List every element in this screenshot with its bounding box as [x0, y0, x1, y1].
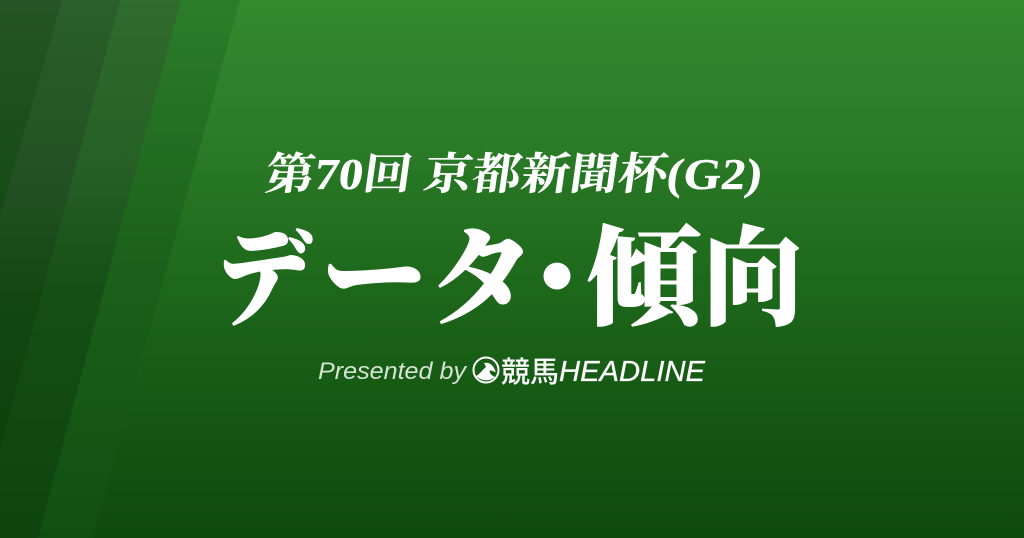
diagonal band 2	[0, 0, 181, 538]
main heading: ー	[321, 192, 427, 347]
subtitle: race name: 第70回 京都新聞杯(G2)	[263, 150, 765, 199]
logo wordmark latin: HEADLINE	[559, 356, 706, 388]
diagonal band 4	[0, 0, 62, 216]
presented by text: Presented by	[318, 358, 468, 385]
main heading: 向	[702, 192, 802, 347]
main heading: ・	[503, 193, 611, 348]
presented by credit	[318, 349, 706, 391]
logo wordmark kanji: 競馬	[501, 349, 559, 391]
main heading: デ	[215, 193, 312, 348]
main heading: タ	[431, 193, 534, 348]
main heading	[215, 192, 802, 348]
icon: horse logo	[474, 358, 498, 382]
diagonal band 3	[0, 0, 120, 450]
main heading: 傾	[587, 192, 709, 347]
diagonal band 1	[0, 0, 240, 538]
